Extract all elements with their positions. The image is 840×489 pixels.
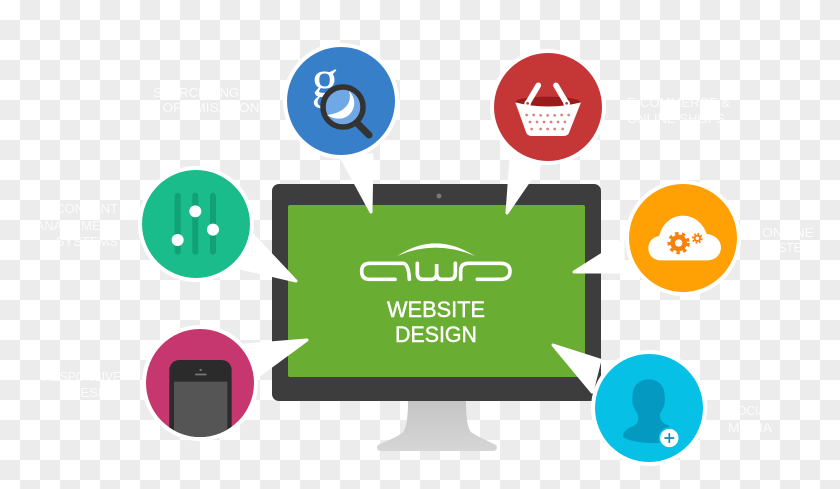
icon: sliders bbox=[172, 193, 219, 255]
label: content management systems: SYSTEMS bbox=[56, 234, 118, 249]
label: content management systems: CONTENT bbox=[55, 201, 118, 216]
logo: awp bbox=[362, 243, 510, 279]
label: social media: MEDIA bbox=[728, 420, 772, 435]
label: online systems: ONLINE bbox=[762, 225, 814, 240]
label: social media bbox=[728, 403, 773, 435]
screen heading: WEBSITE bbox=[387, 297, 485, 322]
label: e-commerce: E-COMMERCE & bbox=[627, 95, 730, 110]
label: search engine optimisation: OPTIMISATION bbox=[162, 100, 260, 115]
label: e-commerce: ONLINE SHOPS bbox=[627, 111, 725, 126]
label: content management systems bbox=[25, 201, 118, 249]
icon: google magnifier: g bbox=[312, 49, 338, 109]
screen bbox=[288, 205, 585, 377]
screen heading: DESIGN bbox=[395, 322, 477, 347]
icon: smartphone bbox=[169, 360, 232, 437]
label: search engine optimisation: SEARCH ENGINE bbox=[153, 85, 261, 100]
webcam bbox=[436, 194, 442, 198]
label: search engine optimisation bbox=[153, 85, 261, 115]
label: responsive design bbox=[43, 369, 121, 400]
label: responsive design: DESIGN bbox=[71, 385, 121, 400]
icon: cloud with gears bbox=[648, 216, 721, 260]
label: e-commerce bbox=[627, 95, 730, 126]
icon: user add bbox=[623, 379, 679, 448]
monitor stand bbox=[377, 400, 497, 451]
label: online systems: SYSTEMS bbox=[762, 240, 820, 255]
label: content management systems: MANAGEMENT bbox=[25, 218, 118, 233]
panel: e-commerce bbox=[490, 49, 606, 165]
panel: online systems bbox=[625, 180, 741, 296]
panel: search engine optimisation bbox=[283, 43, 399, 159]
screen heading bbox=[387, 297, 485, 347]
panel: social media bbox=[591, 350, 707, 466]
monitor bbox=[272, 184, 601, 401]
label: online systems bbox=[762, 225, 820, 255]
label: responsive design: RESPONSIVE bbox=[43, 369, 121, 384]
label: social media: SOCIAL bbox=[729, 403, 773, 418]
panel: content management bbox=[138, 166, 254, 282]
icon: shopping basket bbox=[515, 85, 581, 136]
callout pointers bbox=[240, 155, 623, 392]
panel: responsive design bbox=[142, 325, 258, 441]
